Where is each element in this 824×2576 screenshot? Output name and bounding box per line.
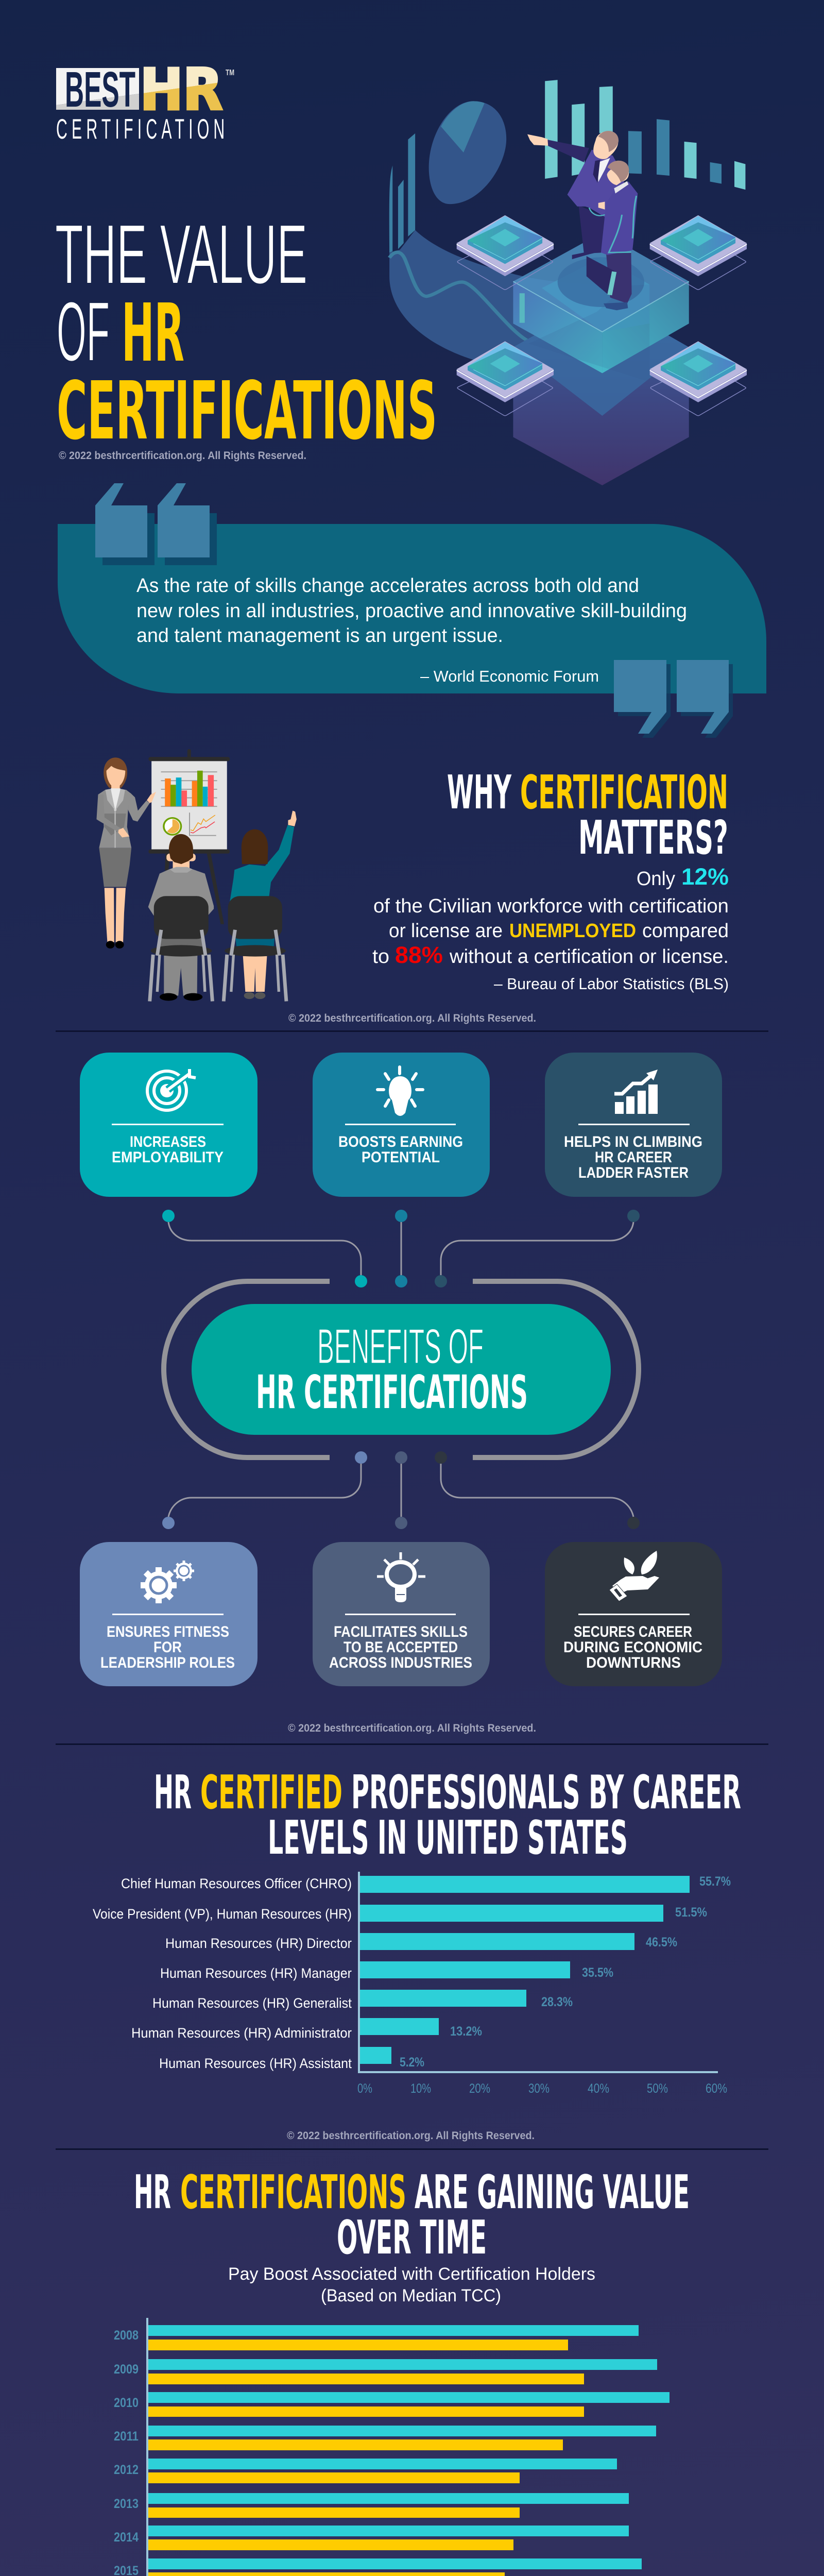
heading: HR certified professionals: HR (154, 1766, 192, 1820)
pie chart (429, 101, 506, 204)
statistic text: – Bureau of Labor Statistics (BLS) (494, 975, 729, 993)
connectors: top cards to hub (162, 1210, 640, 1287)
flip chart (148, 749, 230, 924)
axis labels: 30% (528, 2081, 550, 2096)
card: ensures fitness for leadership roles: ENSURES FITNESS (107, 1623, 229, 1640)
copyright: © 2022 besthrcertification.org. All Rights Reserved. (288, 1012, 536, 1024)
heading: certifications gaining value (134, 2165, 690, 2265)
card: secures career: DOWNTURNS (586, 1654, 681, 1671)
year labels: 2013 (114, 2497, 139, 2511)
card: helps in climbing HR career ladder: HR CAREER (595, 1149, 672, 1166)
card: ensures fitness for leadership roles: LEADERSHIP ROLES (100, 1654, 235, 1671)
hub heading: HR CERTIFICATIONS (256, 1365, 528, 1419)
heading: certifications gaining value: OVER TIME (337, 2211, 487, 2265)
card: increases employability: EMPLOYABILITY (112, 1149, 224, 1166)
card: ensures fitness for leadership roles (80, 1542, 258, 1686)
card: facilitates skills: TO BE ACCEPTED (344, 1639, 458, 1656)
statistic text: 12% (681, 863, 729, 890)
title: OF (57, 284, 110, 379)
axis labels: 20% (469, 2081, 490, 2096)
copyright: © 2022 besthrcertification.org. All Rights Reserved. (288, 1722, 536, 1734)
statistic text: of the Civilian workforce with certification (373, 895, 729, 917)
chips (457, 215, 747, 416)
axis labels: 60% (706, 2081, 727, 2096)
year labels: 2011 (114, 2429, 139, 2444)
card: facilitates skills: ACROSS INDUSTRIES (329, 1654, 472, 1671)
statistic text: compared (642, 920, 729, 942)
quote text: and talent management is an urgent issue. (136, 625, 503, 647)
hub heading: BENEFITS OF (317, 1319, 484, 1374)
axis labels (357, 2081, 727, 2096)
hero illustration: isometric business analytics (389, 80, 747, 485)
businessman pointing (527, 131, 626, 259)
statistic text (372, 863, 729, 993)
heading: certifications gaining value: HR (134, 2165, 171, 2219)
hub brackets (164, 1281, 639, 1458)
quote text (136, 575, 687, 685)
left bars (389, 133, 415, 252)
no certification bars (148, 2340, 584, 2576)
value labels: 46.5% (646, 1935, 677, 1950)
presenter (96, 757, 156, 948)
logo: Best HR Certification (56, 57, 234, 145)
card: helps in climbing HR career ladder (545, 1053, 722, 1197)
heading: certifications gaining value: CERTIFICATIONS (180, 2165, 406, 2219)
opening quote marks (95, 483, 217, 565)
category labels: Voice President (VP), Human Resources (HR) (93, 1906, 352, 1922)
card: boosts earning potential: BOOSTS EARNING (338, 1133, 463, 1150)
heading: HR certified professionals (154, 1766, 741, 1865)
heading: WHY (447, 766, 512, 820)
card: helps in climbing HR career ladder: HELPS IN CLIMBING (564, 1133, 702, 1150)
value labels: 55.7% (699, 1874, 731, 1889)
year labels (114, 2328, 139, 2576)
value labels: 5.2% (400, 2055, 424, 2070)
copyright: © 2022 besthrcertification.org. All Rights Reserved. (287, 2130, 535, 2142)
year labels: 2014 (114, 2530, 139, 2545)
icon: outline bulb (377, 1552, 425, 1602)
card: helps in climbing HR career ladder: LADDER FASTER (578, 1164, 689, 1181)
statistic text: UNEMPLOYED (509, 920, 636, 942)
year labels: 2009 (114, 2362, 139, 2377)
section: why certification matters (372, 766, 729, 993)
connectors: hub to bottom cards (162, 1451, 640, 1529)
year labels: 2008 (114, 2328, 139, 2343)
card: increases employability (80, 1053, 258, 1197)
axis labels: 0% (357, 2081, 372, 2096)
hub heading (256, 1319, 528, 1419)
line graph swoosh (389, 230, 649, 382)
quote text: As the rate of skills change accelerates across both old and (136, 575, 639, 597)
statistic text: without a certification or license. (449, 946, 729, 968)
chart subtitle: (Based on Median TCC) (321, 2286, 501, 2306)
statistic text: to (372, 946, 389, 968)
year labels: 2012 (114, 2463, 139, 2477)
title: CERTIFICATIONS (57, 364, 437, 457)
bar chart: pay boost by year (114, 2318, 710, 2576)
card: facilitates skills: FACILITATES SKILLS (334, 1623, 468, 1640)
statistic text: or license are (389, 920, 503, 942)
axis labels: 40% (588, 2081, 609, 2096)
card: increases employability: INCREASES (130, 1133, 206, 1150)
title: HR (122, 286, 184, 380)
panel: quote (58, 483, 766, 738)
icon: target (147, 1069, 196, 1110)
seated man on chair (148, 834, 214, 1002)
heading (447, 766, 728, 865)
value labels: 35.5% (582, 1965, 613, 1980)
card: secures career: DURING ECONOMIC (563, 1639, 702, 1656)
category labels: Human Resources (HR) Generalist (152, 1995, 352, 2011)
card: facilitates skills (313, 1542, 490, 1686)
icon: rising bar chart (614, 1070, 658, 1114)
category labels: Chief Human Resources Officer (CHRO) (121, 1876, 352, 1891)
value labels: 28.3% (541, 1995, 573, 2009)
icon: light bulb (377, 1067, 423, 1116)
reflected platform (513, 297, 689, 485)
card: ensures fitness for leadership roles: FOR (153, 1639, 182, 1656)
closing quote marks (614, 660, 733, 738)
icon: plant in hand (609, 1551, 659, 1601)
logo: Best HR Certification: BEST (65, 61, 135, 117)
statistic text: Only (637, 868, 675, 890)
heading: HR certified professionals: CERTIFIED (200, 1766, 342, 1820)
glass platform (513, 232, 689, 382)
value labels: 13.2% (450, 2024, 482, 2039)
statistic text: 88% (395, 942, 443, 968)
category labels (93, 1876, 352, 2071)
axes (147, 2318, 698, 2576)
card: secures career: SECURES CAREER (574, 1623, 692, 1640)
value labels: 51.5% (675, 1905, 707, 1920)
logo: Best HR Certification: TM (226, 69, 234, 77)
quote text: new roles in all industries, proactive and innovative skill-building (136, 600, 687, 622)
chart subtitle (228, 2264, 595, 2306)
category labels: Human Resources (HR) Administrator (131, 2025, 352, 2041)
icon: gears (141, 1561, 194, 1603)
title: THE VALUE (55, 207, 307, 301)
seated woman raising hand (224, 811, 297, 1002)
axis labels: 10% (410, 2081, 431, 2096)
axis labels: 50% (647, 2081, 668, 2096)
year labels: 2010 (114, 2396, 139, 2410)
quote text: – World Economic Forum (420, 667, 599, 685)
category labels: Human Resources (HR) Manager (160, 1965, 352, 1981)
axes (359, 1872, 718, 2072)
floating bar chart (545, 80, 745, 190)
bars (360, 1876, 690, 2064)
title (55, 207, 437, 457)
card: secures career (545, 1542, 722, 1686)
chart subtitle: Pay Boost Associated with Certification Holders (228, 2264, 595, 2284)
category labels: Human Resources (HR) Director (165, 1936, 352, 1951)
card: boosts earning potential (313, 1053, 490, 1197)
value labels (400, 1874, 731, 2070)
copyright: © 2022 besthrcertification.org. All Rights Reserved. (59, 450, 306, 462)
logo: Best HR Certification: CERTIFICATION (56, 114, 225, 145)
logo: Best HR Certification: HR (140, 57, 222, 123)
any certification bars (148, 2325, 670, 2576)
illustration: presentation to seated audience (96, 749, 297, 1002)
bar chart: career levels (93, 1872, 731, 2096)
hub: benefits of HR certifications (164, 1281, 639, 1458)
category labels: Human Resources (HR) Assistant (159, 2056, 352, 2071)
card: boosts earning potential: POTENTIAL (362, 1149, 440, 1166)
businessman with briefcase (587, 161, 638, 310)
